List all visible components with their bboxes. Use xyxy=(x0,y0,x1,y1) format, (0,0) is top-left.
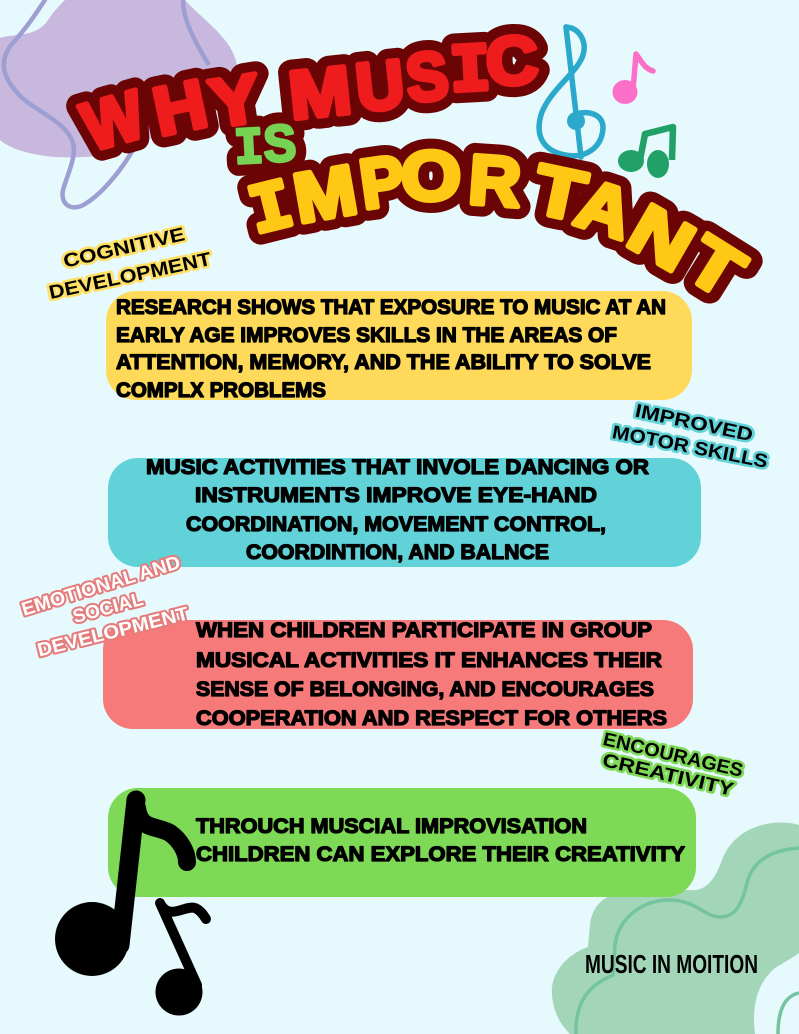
title outline: T xyxy=(674,221,757,313)
title line: IMPORTANT xyxy=(242,137,757,313)
title line: IMPORTANT: M xyxy=(288,150,362,238)
title line: WHY MUSIC: I xyxy=(448,33,493,112)
title outline: M xyxy=(288,150,362,238)
title line: WHY MUSIC: U xyxy=(352,46,408,126)
title outline: M xyxy=(285,52,355,134)
panel: cognitive development: ATTENTION, MEMORY, AND THE ABILITY TO SOLVE xyxy=(116,351,651,374)
panel: improved motor skills: MUSIC ACTIVITIES THAT INVOLE DANCING OR xyxy=(146,456,649,479)
panel: cognitive development: RESEARCH SHOWS THAT EXPOSURE TO MUSIC AT AN xyxy=(116,296,666,319)
panel: improved motor skills: COORDINTION, AND BALNCE xyxy=(246,541,549,564)
title line: IMPORTANT: I xyxy=(242,168,302,255)
title line: WHY MUSIC: M xyxy=(285,52,355,134)
label: encourages creativity: CREATIVITY xyxy=(600,750,736,801)
icon: large black music note xyxy=(55,800,187,976)
title line: IMPORTANT: R xyxy=(466,140,524,222)
title line: IMPORTANT: O xyxy=(401,137,461,215)
title outline: C xyxy=(484,22,540,100)
label: cognitive development xyxy=(47,224,213,304)
panel: encourages creativity xyxy=(108,788,696,897)
title outline: P xyxy=(355,140,409,224)
title outline: R xyxy=(466,140,524,222)
icon: small black music note xyxy=(156,903,206,1016)
title line: WHY MUSIC xyxy=(74,22,540,166)
panel: emotional and social development: SENSE OF BELONGING, AND ENCOURAGES xyxy=(196,678,654,701)
label: cognitive development: COGNITIVE xyxy=(61,224,187,273)
label: emotional and social development: SOCIAL xyxy=(71,589,146,628)
label: emotional and social development: EMOTIONAL AND xyxy=(19,552,183,621)
panel: cognitive development: EARLY AGE IMPROVES SKILLS IN THE AREAS OF xyxy=(116,324,617,347)
title line: WHY MUSIC: W xyxy=(74,76,153,166)
panel: improved motor skills xyxy=(108,456,701,567)
title outline: IS xyxy=(233,114,298,180)
decoration: purple blob xyxy=(0,0,237,207)
title outline: H xyxy=(147,65,214,151)
label: cognitive development: DEVELOPMENT xyxy=(47,249,213,304)
title outline: A xyxy=(567,164,642,254)
title outline: T xyxy=(527,150,592,236)
title word: IS: IS xyxy=(233,114,298,180)
label: emotional and social development xyxy=(19,552,191,661)
title line: IMPORTANT: T xyxy=(674,221,757,313)
label: improved motor skills xyxy=(610,401,769,473)
title xyxy=(74,22,757,313)
panel: emotional and social development: COOPERATION AND RESPECT FOR OTHERS xyxy=(196,707,667,730)
title line: IMPORTANT: P xyxy=(355,140,409,224)
label: improved motor skills: IMPROVED xyxy=(633,401,755,446)
title line: WHY MUSIC: S xyxy=(402,37,452,117)
title line: IMPORTANT: N xyxy=(616,189,707,287)
label: encourages creativity xyxy=(600,729,745,801)
title outline: I xyxy=(448,33,493,112)
decoration: green blob xyxy=(552,823,799,1034)
panel: emotional and social development: MUSICAL ACTIVITIES IT ENHANCES THEIR xyxy=(196,649,662,672)
title outline: U xyxy=(352,46,408,126)
title line: IMPORTANT: T xyxy=(527,150,592,236)
title outline: O xyxy=(401,137,461,215)
panel: improved motor skills: INSTRUMENTS IMPROVE EYE-HAND xyxy=(195,484,597,507)
title line: IMPORTANT: A xyxy=(567,164,642,254)
title outline: N xyxy=(616,189,707,287)
panel: cognitive development xyxy=(106,291,692,402)
icon: pink music note xyxy=(612,54,653,104)
panel: encourages creativity: CHILDREN CAN EXPLORE THEIR CREATIVITY xyxy=(196,843,685,866)
title line: WHY MUSIC: H xyxy=(147,65,214,151)
label: encourages creativity: ENCOURAGES xyxy=(601,729,745,782)
label: improved motor skills: MOTOR SKILLS xyxy=(610,422,769,473)
title line: WHY MUSIC: Y xyxy=(205,60,266,142)
panel: improved motor skills: COORDINATION, MOVEMENT CONTROL, xyxy=(186,513,606,536)
label: emotional and social development: DEVELOPMENT xyxy=(35,603,191,661)
title outline: I xyxy=(242,168,302,255)
title line: WHY MUSIC: C xyxy=(484,22,540,100)
panel: encourages creativity: THROUCH MUSCIAL IMPROVISATION xyxy=(196,815,587,838)
title outline: W xyxy=(74,76,153,166)
panel: cognitive development: COMPLX PROBLEMS xyxy=(116,379,326,402)
panel: emotional and social development xyxy=(103,619,693,730)
icon: green double note xyxy=(618,127,673,178)
icon: treble clef xyxy=(539,27,603,157)
title outline: Y xyxy=(205,60,266,142)
title outline xyxy=(74,22,757,313)
panel: emotional and social development: WHEN CHILDREN PARTICIPATE IN GROUP xyxy=(196,619,652,642)
title outline: S xyxy=(402,37,452,117)
